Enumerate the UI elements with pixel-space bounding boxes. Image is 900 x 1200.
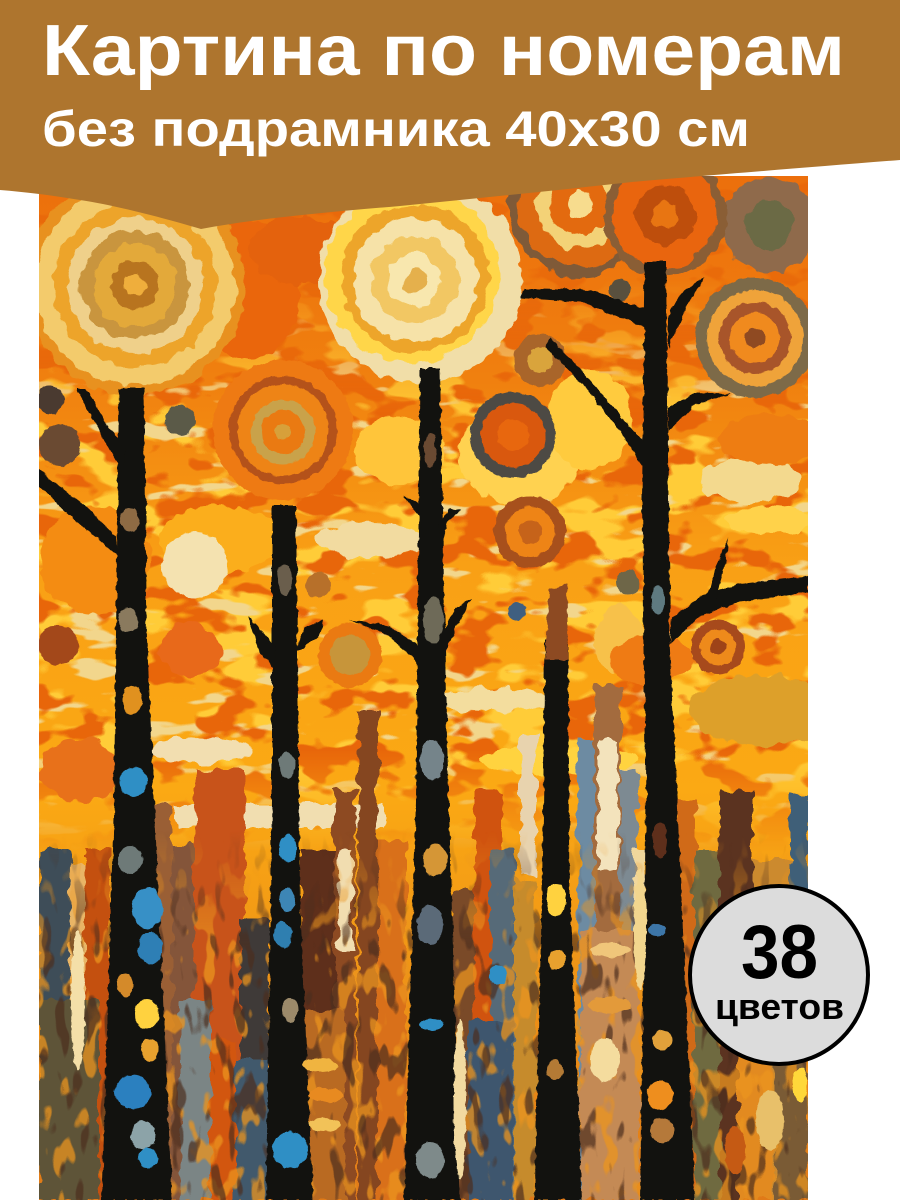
small circles and dots [36, 279, 745, 687]
big sun centre [318, 178, 522, 382]
painting: autumn forest [25, 133, 830, 1200]
big sun left [39, 198, 246, 396]
tree 1 [39, 388, 172, 1200]
tree 5 [534, 640, 582, 1200]
badge circle [690, 886, 868, 1064]
tree 3 [350, 368, 472, 1200]
sky paint blotches [39, 289, 808, 844]
subtitle: без подрамника 40х30 см [42, 101, 750, 157]
orange sun [213, 360, 353, 500]
sky highlights [40, 215, 830, 828]
tree 2 [248, 505, 324, 1200]
badge label: цветов [715, 986, 844, 1027]
upper sky orange blotches [39, 201, 808, 360]
top banner [0, 0, 900, 229]
tree trunks and branches [39, 262, 808, 1200]
trunk speckles [115, 432, 674, 1178]
top right spirals [506, 176, 808, 280]
lower colour dabs [71, 870, 807, 1180]
badge number: 38 [741, 910, 818, 995]
tree 4 [520, 262, 808, 1200]
lower texture blotches [39, 839, 808, 1200]
tree 5 brown top [545, 583, 568, 660]
sky background [39, 176, 808, 1200]
right spiral [695, 278, 815, 398]
title: Картина по номерам [42, 11, 845, 91]
colour count badge [690, 886, 868, 1064]
background tree columns [39, 685, 808, 1200]
